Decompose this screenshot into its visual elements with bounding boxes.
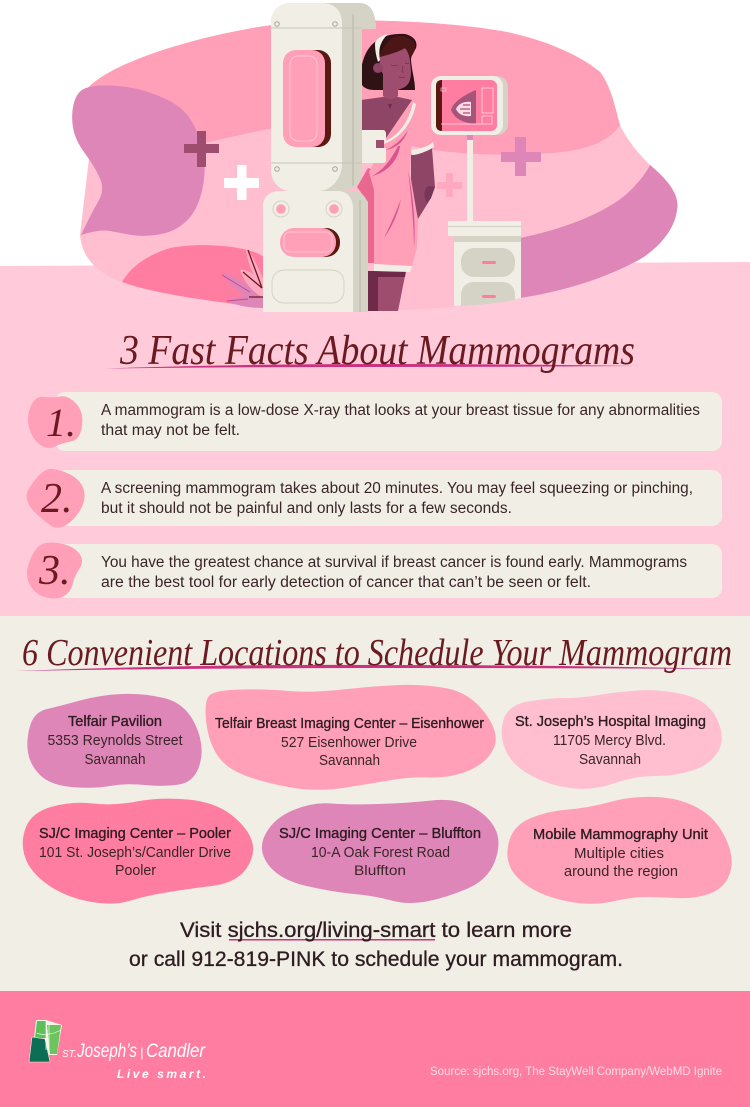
- fact 3: are the best tool for early detection of cancer that can’t be seen or felt.: [101, 574, 591, 591]
- arm: [411, 148, 435, 219]
- location: Telfair Pavilion: Telfair Pavilion: [68, 714, 162, 730]
- location: SJ/C Imaging Center Pooler: SJ/C Imaging Center – Pooler: [39, 826, 231, 842]
- location: Mobile Mammography Unit: Multiple cities: [574, 846, 664, 862]
- icon: plant: [222, 250, 264, 308]
- fact 1: 1.: [46, 400, 76, 445]
- dress: [369, 103, 418, 266]
- location: SJ/C Imaging Center Pooler: Pooler: [115, 863, 156, 879]
- location: Telfair Pavilion: [27, 694, 202, 788]
- call to action: Visit sjchs.org/living-smart to learn more: [180, 919, 572, 942]
- location: St. Joseph's Hospital Imaging: Savannah: [579, 752, 641, 768]
- location: SJ/C Imaging Center Pooler: [23, 799, 253, 904]
- logo wordmark: Candler: [146, 1041, 206, 1062]
- cabinet: [454, 236, 521, 306]
- fact 1: A mammogram is a low-dose X-ray that looks at your breast tissue for any abnormalities: [101, 402, 700, 419]
- call to action: [129, 919, 623, 971]
- lower window: [310, 228, 340, 257]
- logo: St. Joseph's/Candler: [29, 1020, 206, 1081]
- neck and face: [380, 48, 411, 99]
- dress hem: [374, 264, 412, 272]
- chest mark and face lines: [388, 104, 392, 109]
- location: Telfair Breast Imaging: 527 Eisenhower Drive: [281, 735, 417, 751]
- logo tagline: Live smart.: [117, 1067, 206, 1081]
- location: Mobile Mammography Unit: Mobile Mammography Unit: [533, 827, 708, 843]
- location: SJ/C Imaging Center Pooler: 101 St. Joseph’s/Candler Drive: [39, 845, 231, 861]
- plus signs: [184, 131, 541, 200]
- location: Mobile Mammography Unit: around the region: [564, 864, 678, 880]
- location: Telfair Pavilion: 5353 Reynolds Street: [48, 733, 182, 749]
- shoulders and chest: [361, 97, 412, 141]
- fact 3: You have the greatest chance at survival if breast cancer is found early. Mammograms: [101, 554, 687, 571]
- hair fringe: [380, 36, 415, 58]
- location: SJ/C Imaging Center Bluffton: 10-A Oak Forest Road: [311, 845, 450, 861]
- location: St. Joseph's Hospital Imaging: [502, 690, 722, 789]
- location: SJ/C Imaging Center Bluffton: SJ/C Imaging Center – Bluffton: [279, 826, 481, 842]
- icon: green cross mark: [29, 1020, 62, 1062]
- location: SJ/C Imaging Center Bluffton: [262, 800, 498, 903]
- title: 3 Fast Facts About Mammograms: [119, 328, 635, 374]
- location: Telfair Breast Imaging: Savannah: [319, 753, 380, 769]
- location: St. Joseph's Hospital Imaging: St. Joseph’s Hospital Imaging: [515, 714, 706, 730]
- clamp: [362, 130, 386, 163]
- logo wordmark: Joseph’s: [76, 1041, 137, 1062]
- fact 3: 3.: [38, 548, 70, 594]
- fact 2: [27, 469, 722, 528]
- lower unit: [263, 191, 368, 312]
- call to action: or call 912-819-PINK to schedule your mammogram.: [129, 948, 623, 971]
- dress shadow: [357, 168, 374, 263]
- upper unit: [271, 3, 362, 191]
- location: Mobile Mammography Unit: [507, 797, 732, 904]
- fact 1: [28, 392, 722, 451]
- location: SJ/C Imaging Center Bluffton: Bluffton: [354, 863, 406, 878]
- background blob: [72, 21, 677, 311]
- locations panel background: [0, 616, 750, 991]
- hero illustration: [72, 3, 677, 312]
- location: Telfair Pavilion: Savannah: [84, 752, 146, 768]
- breast scan image: [451, 90, 476, 124]
- woman: [357, 34, 435, 311]
- sleeve: [411, 142, 434, 155]
- location: St. Joseph's Hospital Imaging: 11705 Mercy Blvd.: [553, 733, 666, 749]
- source note: Source: sjchs.org, The StayWell Company/WebMD Ignite: [430, 1066, 722, 1078]
- fact 3: [27, 543, 722, 598]
- headband: [375, 34, 388, 62]
- monitor on stand: [431, 76, 521, 306]
- fact 1: that may not be felt.: [101, 422, 240, 439]
- legs: [368, 271, 406, 311]
- footer band: [0, 991, 750, 1107]
- pink facts band: [0, 262, 750, 616]
- monitor: [440, 76, 508, 135]
- fact 2: but it should not be painful and only lasts for a few seconds.: [101, 500, 512, 517]
- location: Telfair Breast Imaging: Telfair Breast Imaging Center – Eisenhower: [215, 716, 484, 732]
- fact 2: 2.: [41, 476, 72, 522]
- location: Telfair Breast Imaging: [206, 685, 496, 790]
- logo wordmark: ST.: [62, 1049, 77, 1060]
- upper window: [300, 50, 331, 147]
- mammogram machine: [263, 3, 386, 312]
- hair: [361, 34, 417, 90]
- dress folds: [372, 130, 415, 247]
- stand: [467, 140, 473, 221]
- ear: [373, 63, 383, 73]
- logo wordmark: |: [140, 1045, 143, 1060]
- fact 2: A screening mammogram takes about 20 minutes. You may feel squeezing or pinching,: [101, 480, 693, 497]
- machine top cap: [330, 3, 376, 29]
